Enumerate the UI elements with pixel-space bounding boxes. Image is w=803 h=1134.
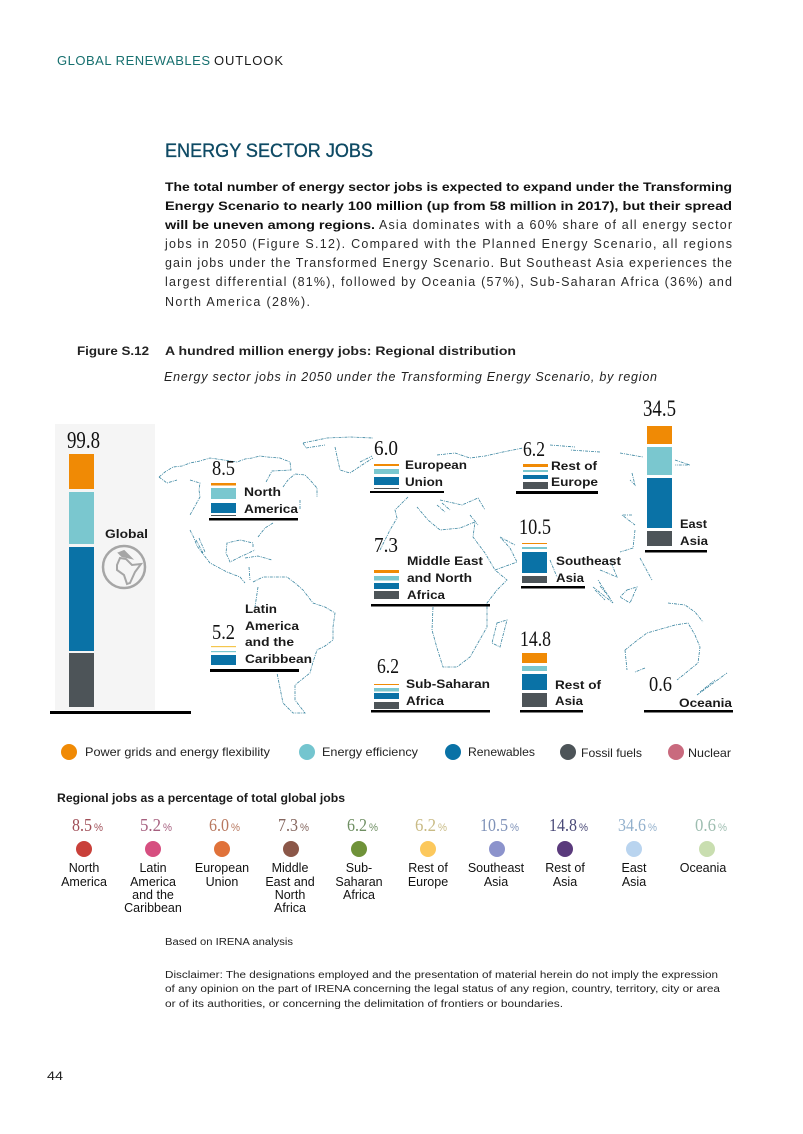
running header: OUTLOOK — [214, 53, 283, 68]
item: East Asia: Asia — [622, 875, 646, 889]
value: global total: 99.8 — [67, 428, 100, 454]
item: Rest of Europe — [408, 815, 448, 889]
disclaimer — [165, 970, 721, 1010]
region: North America: North — [244, 485, 281, 499]
item: Middle East and North Africa: East and — [265, 875, 315, 889]
item: European Union: Union — [206, 875, 238, 889]
world map outline — [159, 437, 727, 713]
item: Rest of Europe: % — [438, 822, 447, 834]
item: Rest of Asia: Rest of — [545, 861, 585, 875]
item: Middle East and North Africa: 7.3 — [278, 815, 298, 835]
legend: Nuclear — [688, 746, 731, 760]
figure caption — [77, 344, 516, 358]
regional percentage row — [61, 815, 727, 915]
baseline: global — [50, 711, 191, 714]
region: Rest of Europe: Rest of — [551, 459, 598, 473]
region: Latin America and the Caribbean: Latin — [245, 602, 277, 616]
region: Rest of Asia: 14.8 — [520, 626, 551, 651]
intro paragraph: North America (28%). — [165, 295, 310, 309]
item: Southeast Asia — [468, 815, 525, 889]
intro paragraph: gain jobs under the Transformed Energy Scenario. But Southeast Asia experiences the — [165, 256, 732, 270]
region: Rest of Europe: Europe — [551, 475, 598, 489]
region: Middle East and North Africa: Middle East — [407, 554, 483, 568]
item: European Union — [195, 815, 249, 889]
item: East Asia: East — [621, 861, 647, 875]
region: Southeast Asia — [519, 514, 621, 588]
region: North America — [209, 456, 298, 520]
region: Southeast Asia: Southeast — [556, 554, 621, 568]
item: Southeast Asia: Asia — [484, 875, 508, 889]
region: Middle East and North Africa — [371, 533, 490, 606]
item: Rest of Europe: Europe — [408, 875, 448, 889]
region: Southeast Asia: 10.5 — [519, 514, 551, 539]
region: Latin America and the Caribbean: and the — [245, 635, 294, 649]
region: Rest of Asia — [520, 626, 602, 712]
region: East Asia: East — [680, 517, 707, 531]
item: Latin America and the Caribbean: and the — [132, 888, 174, 902]
running header — [57, 53, 283, 68]
item: Middle East and North Africa: % — [300, 822, 309, 834]
region: North America: America — [244, 502, 298, 516]
region: Rest of Europe — [516, 437, 598, 494]
item: Latin America and the Caribbean: Caribbean — [124, 901, 182, 915]
item: East Asia — [618, 815, 657, 889]
intro paragraph: jobs in 2050 (Figure S.12). Compared with the Planned Energy Scenario, all regions — [164, 237, 732, 251]
legend — [61, 744, 731, 760]
region: North America: 8.5 — [212, 456, 235, 480]
item: Southeast Asia: % — [510, 822, 519, 834]
item: Sub-Saharan Africa: Saharan — [335, 875, 383, 889]
disclaimer: of any opinion on the part of IRENA concerning the legal status of any region, country, territory, city or area — [165, 984, 721, 995]
item: Southeast Asia: Southeast — [468, 861, 525, 875]
item: East Asia: % — [648, 822, 657, 834]
heading: regional percentages: Regional jobs as a percentage of total global jobs — [57, 791, 345, 805]
item: North America: % — [94, 822, 103, 834]
source note: Based on IRENA analysis — [165, 937, 293, 948]
figure caption: A hundred million energy jobs: Regional distribution — [165, 344, 516, 358]
region: East Asia: 34.5 — [643, 396, 676, 421]
item: Rest of Europe: 6.2 — [415, 815, 436, 835]
intro paragraph: will be uneven among regions. — [164, 218, 375, 232]
page number: 44 — [47, 1069, 63, 1083]
region: Southeast Asia: Asia — [556, 571, 584, 585]
legend: Renewables — [468, 745, 535, 759]
figure caption: Figure S.12 — [77, 344, 149, 358]
item: European Union: European — [195, 861, 249, 875]
item: Oceania: Oceania — [680, 861, 726, 875]
region: Latin America and the Caribbean — [210, 602, 312, 672]
item: Oceania: % — [718, 822, 727, 834]
region: Latin America and the Caribbean: America — [245, 619, 299, 633]
item: North America: America — [61, 875, 107, 889]
legend: Power grids and energy flexibility — [85, 745, 270, 759]
stacked bar: global — [69, 454, 94, 707]
item: Rest of Europe: Rest of — [408, 861, 448, 875]
region: Sub-Saharan Africa: 6.2 — [377, 654, 399, 678]
disclaimer: or of its authorities, or concerning the delimitation of frontiers or boundaries. — [165, 999, 563, 1010]
item: Middle East and North Africa: North — [275, 888, 305, 902]
item: Middle East and North Africa — [265, 815, 315, 915]
region: European Union: Union — [405, 475, 443, 489]
intro paragraph: Asia dominates with a 60% share of all energy sector — [379, 218, 732, 232]
running header: GLOBAL RENEWABLES — [57, 53, 210, 68]
region: Middle East and North Africa: Africa — [407, 588, 445, 602]
item: Oceania: 0.6 — [695, 815, 716, 835]
item: Rest of Asia: Asia — [553, 875, 577, 889]
disclaimer: Disclaimer: The designations employed and the presentation of material herein do not imply the expression — [165, 970, 718, 981]
region: East Asia: Asia — [680, 534, 708, 548]
intro paragraph — [164, 180, 732, 309]
item: East Asia: 34.6 — [618, 815, 646, 835]
region: Rest of Asia: Rest of — [555, 678, 602, 692]
label: global: Global — [105, 527, 148, 541]
item: Sub-Saharan Africa: % — [369, 822, 378, 834]
region: Latin America and the Caribbean: 5.2 — [212, 620, 235, 644]
region: Rest of Asia: Asia — [555, 694, 583, 708]
panel: global — [50, 424, 191, 714]
item: Latin America and the Caribbean: Latin — [139, 861, 167, 875]
item: Sub-Saharan Africa: 6.2 — [347, 815, 367, 835]
item: Sub-Saharan Africa — [335, 815, 383, 902]
item: Sub-Saharan Africa: Sub- — [346, 861, 372, 875]
legend: Energy efficiency — [322, 745, 418, 759]
region: Sub-Saharan Africa: Africa — [406, 694, 444, 708]
item: Latin America and the Caribbean — [124, 815, 182, 915]
legend: Fossil fuels — [581, 746, 642, 760]
icon: globe — [103, 546, 145, 588]
region: Middle East and North Africa: and North — [407, 571, 472, 585]
item: Southeast Asia: 10.5 — [480, 815, 508, 835]
region: Rest of Europe: 6.2 — [523, 437, 545, 461]
region: European Union — [370, 436, 467, 493]
intro paragraph: The total number of energy sector jobs is expected to expand under the Transforming — [165, 180, 732, 194]
item: Rest of Asia: 14.8 — [549, 815, 577, 835]
item: European Union: % — [231, 822, 240, 834]
item: Rest of Asia — [545, 815, 588, 889]
item: Rest of Asia: % — [579, 822, 588, 834]
region: Sub-Saharan Africa — [371, 654, 490, 712]
intro paragraph: Energy Scenario to nearly 100 million (up from 58 million in 2017), but their spread — [165, 199, 732, 213]
item: Sub-Saharan Africa: Africa — [343, 888, 375, 902]
item: Middle East and North Africa: Middle — [272, 861, 308, 875]
item: Latin America and the Caribbean: % — [163, 822, 172, 834]
item: Latin America and the Caribbean: America — [130, 875, 176, 889]
item: North America — [61, 815, 107, 889]
figure subtitle: Energy sector jobs in 2050 under the Transforming Energy Scenario, by region — [164, 370, 657, 384]
item: North America: North — [69, 861, 99, 875]
region: Oceania: Oceania — [679, 696, 732, 710]
intro paragraph: largest differential (81%), followed by Oceania (57%), Sub-Saharan Africa (36%) and — [165, 275, 732, 289]
region: East Asia — [643, 396, 708, 552]
region: Oceania: 0.6 — [649, 672, 672, 696]
item: Latin America and the Caribbean: 5.2 — [140, 815, 161, 835]
title: ENERGY SECTOR JOBS — [165, 141, 373, 162]
region: European Union: 6.0 — [374, 436, 398, 460]
region: Middle East and North Africa: 7.3 — [374, 533, 398, 557]
item: European Union: 6.0 — [209, 815, 229, 835]
region: Sub-Saharan Africa: Sub-Saharan — [406, 677, 490, 691]
item: Middle East and North Africa: Africa — [274, 901, 306, 915]
item: Oceania — [680, 815, 727, 875]
region: Latin America and the Caribbean: Caribbean — [245, 652, 312, 666]
item: North America: 8.5 — [72, 815, 92, 835]
region: European Union: European — [405, 458, 467, 472]
region: Oceania — [644, 672, 733, 712]
